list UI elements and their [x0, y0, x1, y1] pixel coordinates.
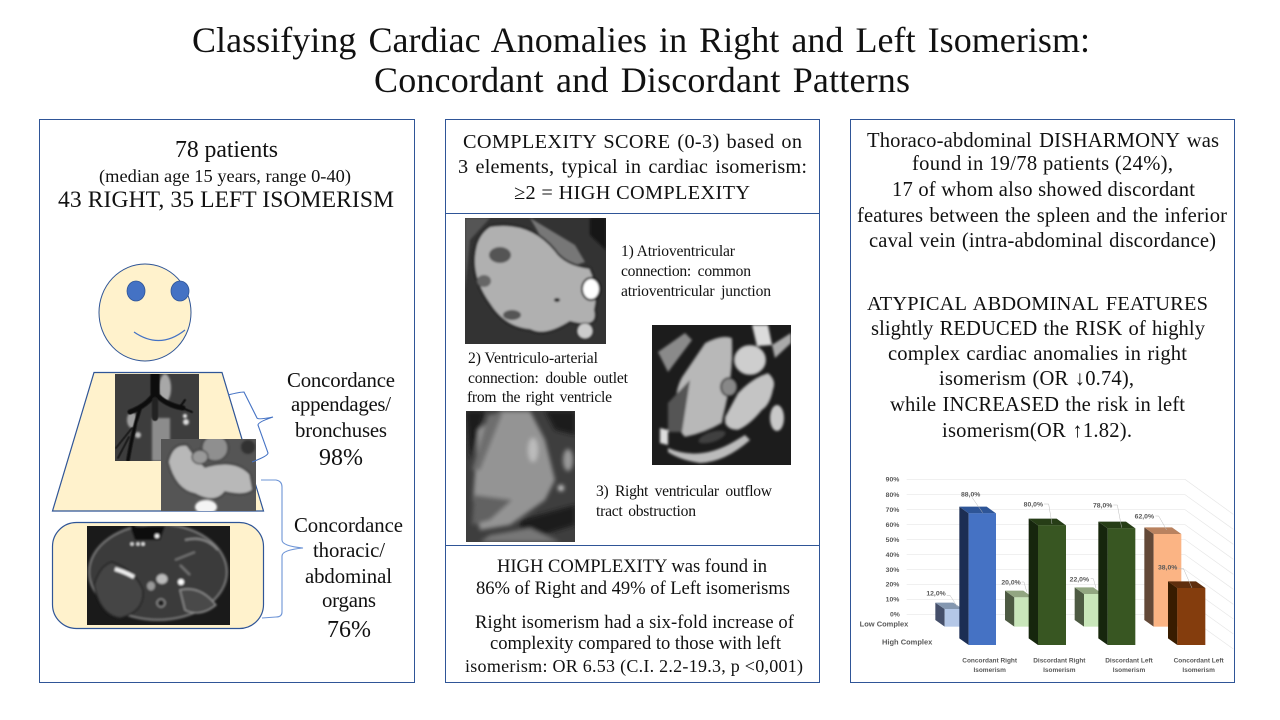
atypical abdominal features text: slightly REDUCED the RISK of highly	[871, 318, 1206, 340]
caption: outflow tract obstruction	[596, 483, 773, 520]
caption: ventriculo-arterial connection: from the right ventricle	[467, 389, 612, 406]
patient summary text: 78 patients	[175, 137, 278, 163]
bars: concordant right isomerism	[935, 507, 996, 645]
chart axis labels: 80%	[886, 492, 899, 499]
patient summary text	[58, 137, 394, 213]
bars: concordant left isomerism	[1144, 527, 1205, 645]
image: heart MRI	[161, 435, 256, 514]
chart axis labels	[860, 477, 933, 646]
complexity score heading: 3 elements, typical in cardiac isomerism:	[458, 156, 807, 178]
concordance thoracic/abdominal label: abdominal	[305, 565, 392, 588]
panel: complexity score	[446, 120, 820, 682]
caption: outflow tract obstruction: tract obstruction	[596, 503, 696, 520]
category labels: Isomerism	[1182, 667, 1215, 674]
concordance appendages/bronchuses label: bronchuses	[295, 419, 387, 442]
thorax trapezoid	[52, 372, 264, 511]
concordance thoracic/abdominal label: 76%	[327, 617, 371, 643]
atypical abdominal features text: ATYPICAL ABDOMINAL FEATURES	[867, 293, 1208, 315]
category labels	[962, 658, 1225, 674]
caption: atrioventricular connection	[621, 243, 771, 300]
caption: ventriculo-arterial connection: connection: double outlet	[468, 370, 629, 387]
data labels: 12,0%	[926, 590, 946, 597]
caption: ventriculo-arterial connection: 2) Ventriculo-arterial	[468, 350, 599, 367]
caption: outflow tract obstruction: 3) Right ventricular outflow	[596, 483, 773, 500]
image: bronchi MRI	[115, 374, 199, 461]
concordance thoracic/abdominal label	[294, 514, 403, 643]
data labels: 78,0%	[1093, 503, 1112, 510]
caption: atrioventricular connection: atrioventricular junction	[621, 283, 771, 300]
atypical abdominal features text: while INCREASED the risk in left	[890, 394, 1185, 416]
caption: atrioventricular connection: 1) Atrioventricular	[621, 243, 736, 260]
disharmony text: features between the spleen and the inferior	[857, 205, 1227, 227]
chart axis labels: Low Complex	[860, 619, 909, 628]
image: ventriculo-arterial MRI	[652, 325, 791, 465]
data labels: 38,0%	[1158, 565, 1177, 572]
chart axis labels: 10%	[886, 597, 899, 604]
category labels: Concordant Right	[962, 658, 1018, 665]
concordance thoracic/abdominal label: thoracic/	[313, 539, 385, 562]
image: outflow tract MRI	[466, 411, 575, 542]
disharmony text	[857, 130, 1227, 252]
concordance appendages/bronchuses label	[287, 369, 395, 471]
data labels: 80,0%	[1024, 502, 1043, 509]
category labels: Isomerism	[973, 667, 1006, 674]
image: abdomen MRI	[87, 524, 230, 625]
high complexity findings	[465, 556, 803, 677]
high complexity findings: isomerism: OR 6.53 (C.I. 2.2-19.3, p <0,001)	[465, 656, 803, 677]
title: Concordant and Discordant Patterns	[374, 60, 910, 100]
concordance appendages/bronchuses label: 98%	[319, 445, 363, 471]
category labels: Discordant Left	[1105, 658, 1154, 665]
panel: disharmony and risk	[850, 120, 1234, 682]
image: atrioventricular MRI	[465, 218, 606, 344]
chart axis labels: 30%	[886, 567, 899, 574]
concordance appendages/bronchuses label: appendages/	[291, 393, 391, 416]
chart axis labels: High Complex	[882, 637, 933, 646]
data labels: 88,0%	[961, 492, 980, 499]
chart axis labels: 70%	[886, 507, 899, 514]
high complexity findings: Right isomerism had a six-fold increase of	[475, 612, 795, 633]
high complexity findings: complexity compared to those with left	[490, 633, 782, 654]
high complexity findings: HIGH COMPLEXITY was found in	[497, 556, 768, 577]
disharmony text: found in 19/78 patients (24%),	[912, 153, 1173, 175]
category labels: Discordant Right	[1033, 658, 1086, 665]
chart axis labels: 50%	[886, 537, 899, 544]
data labels: 22,0%	[1070, 577, 1089, 584]
patient summary text: (median age 15 years, range 0-40)	[99, 166, 351, 187]
complexity score heading: COMPLEXITY SCORE (0-3) based on	[463, 131, 802, 153]
chart axis labels: 40%	[886, 552, 899, 559]
atypical abdominal features text	[867, 293, 1208, 442]
chart axis labels: 90%	[886, 477, 899, 484]
complexity score heading: ≥2 = HIGH COMPLEXITY	[514, 182, 750, 204]
caption: ventriculo-arterial connection	[467, 350, 629, 406]
disharmony text: 17 of whom also showed discordant	[892, 179, 1195, 201]
icon: smiling face	[99, 264, 191, 361]
concordance thoracic/abdominal label: organs	[322, 589, 376, 612]
category labels: Isomerism	[1113, 667, 1145, 674]
chart axis labels: 0%	[890, 612, 900, 619]
data labels: 20,0%	[1001, 580, 1021, 587]
concordance appendages/bronchuses label: Concordance	[287, 369, 395, 392]
bar chart	[860, 477, 1233, 674]
bars: discordant right isomerism	[1005, 519, 1066, 645]
data labels	[926, 492, 1192, 607]
disharmony text: caval vein (intra-abdominal discordance)	[869, 230, 1216, 252]
disharmony text: Thoraco-abdominal DISHARMONY was	[867, 130, 1219, 152]
abdomen rounded box	[52, 522, 264, 628]
chart axis labels: 20%	[886, 582, 899, 589]
title	[192, 20, 1090, 100]
title: Classifying Cardiac Anomalies in Right and Left Isomerism:	[192, 20, 1090, 60]
panel: patients	[40, 120, 414, 682]
bars: discordant left isomerism	[1075, 522, 1135, 645]
caption: atrioventricular connection: connection: common	[621, 263, 751, 280]
category labels: Isomerism	[1043, 667, 1076, 674]
patient summary text: 43 RIGHT, 35 LEFT ISOMERISM	[58, 187, 394, 213]
data labels: 62,0%	[1135, 513, 1154, 520]
complexity score heading	[458, 131, 807, 204]
chart axis labels: 60%	[886, 522, 899, 529]
atypical abdominal features text: complex cardiac anomalies in right	[888, 343, 1187, 365]
category labels: Concordant Left	[1174, 658, 1225, 665]
high complexity findings: 86% of Right and 49% of Left isomerisms	[476, 578, 790, 599]
brace: thoracic/abdominal organs	[261, 480, 303, 618]
atypical abdominal features text: isomerism(OR ↑1.82).	[942, 420, 1132, 442]
concordance thoracic/abdominal label: Concordance	[294, 514, 403, 537]
brace: appendages/bronchuses	[228, 392, 273, 462]
atypical abdominal features text: isomerism (OR ↓0.74),	[939, 368, 1134, 390]
